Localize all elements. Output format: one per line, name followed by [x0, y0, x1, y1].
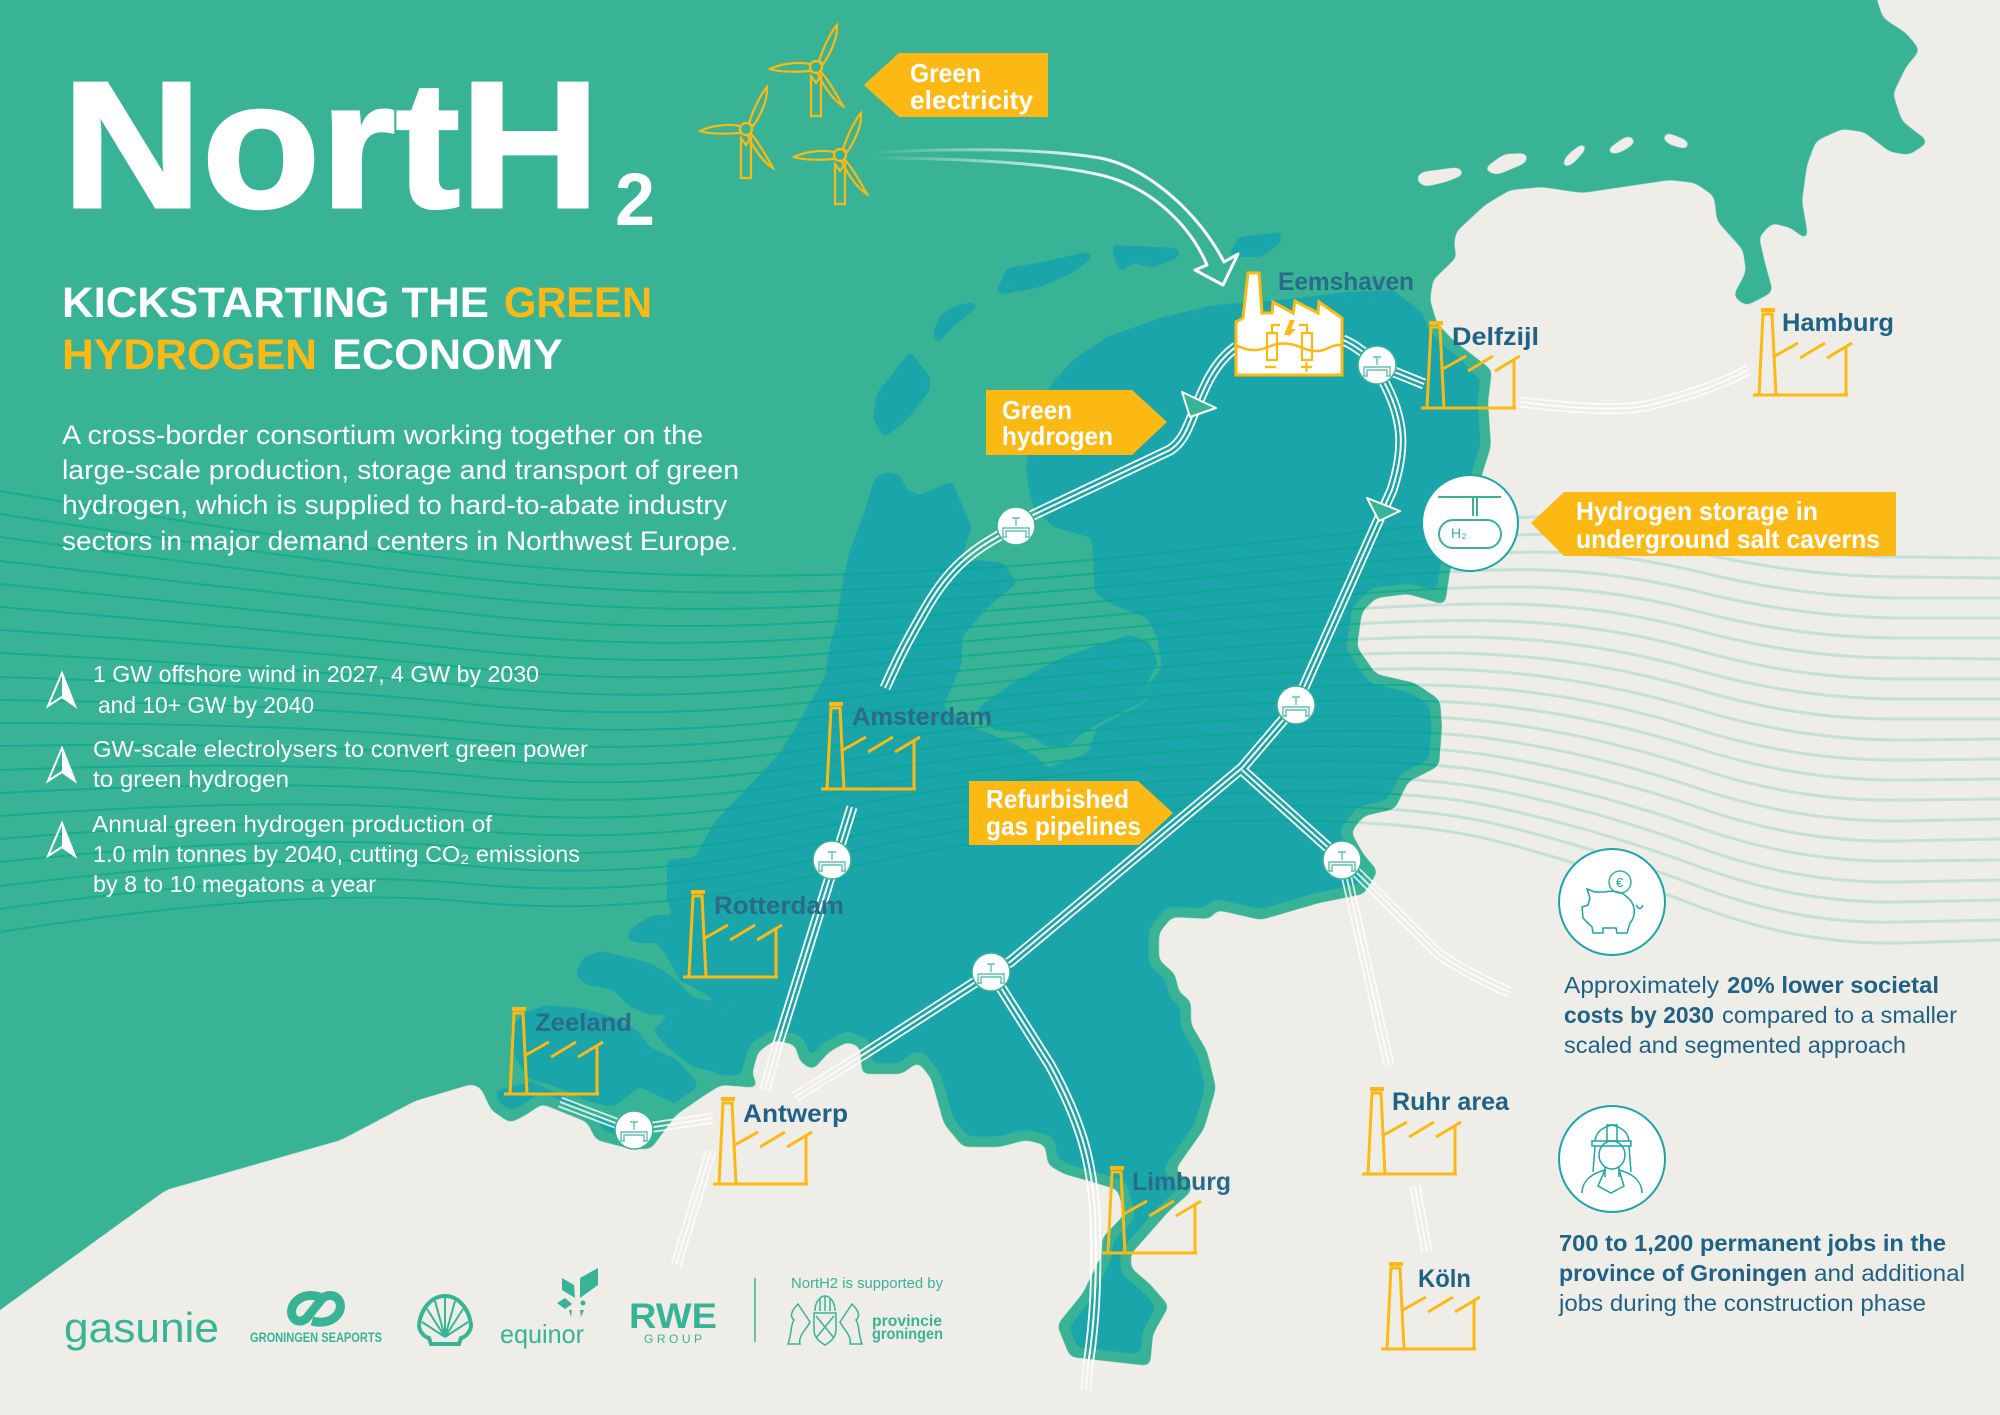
bullet: annual production: Annual green hydrogen production of — [92, 811, 493, 837]
label: Eemshaven: Eemshaven — [1278, 268, 1414, 296]
factory: Köln — [1381, 1264, 1480, 1349]
factory: Rotterdam: Rotterdam — [714, 892, 844, 920]
subtitle: GREEN — [504, 279, 652, 327]
text: permanent jobs: jobs during the construction phase — [1558, 1290, 1926, 1316]
flow arrow: storage — [1367, 498, 1400, 521]
refurbished gas pipelines — [760, 330, 1440, 1370]
callout: refurbished gas pipelines: Refurbished — [986, 784, 1129, 814]
wave lines over sea and Netherlands — [0, 491, 2000, 943]
subtitle: HYDROGEN — [62, 331, 317, 379]
factory: Hamburg: Hamburg — [1782, 309, 1894, 337]
subtitle: KICKSTARTING THE — [62, 279, 489, 327]
callout: hydrogen storage: Hydrogen storage in — [1576, 496, 1818, 526]
flow arrow: green hydrogen — [1182, 392, 1216, 417]
logo: Groningen Seaports — [250, 1295, 382, 1345]
bullet: electrolysers: GW-scale electrolysers to convert green power — [93, 736, 588, 762]
logo: provincie Groningen — [788, 1275, 943, 1345]
logo: provincie Groningen: groningen — [872, 1326, 943, 1343]
logo: Equinor: equinor — [500, 1319, 584, 1349]
factory: Hamburg — [1753, 309, 1894, 395]
factory: Ruhr area: Ruhr area — [1392, 1088, 1510, 1116]
factory: Delfzijl: Delfzijl — [1452, 323, 1539, 351]
green electricity arrow — [870, 150, 1238, 285]
callout: green electricity — [864, 53, 1048, 117]
intro paragraph: A cross-border consortium working together on the — [62, 420, 703, 450]
map: Flevoland polder — [977, 635, 1158, 747]
callout: hydrogen storage: underground salt caverns — [1576, 524, 1880, 554]
icon: Eemshaven electrolyser factory — [1236, 273, 1342, 375]
text: societal costs — [1564, 972, 1957, 1058]
factory: Amsterdam — [821, 703, 992, 789]
factory: Antwerp — [713, 1099, 848, 1184]
bullet: offshore wind: 1 GW offshore wind in 2027, 4 GW by 2030 — [93, 661, 539, 687]
intro paragraph: hydrogen, which is supplied to hard-to-abate industry — [62, 490, 728, 520]
title: NortH — [62, 45, 600, 246]
logo: Shell — [419, 1296, 471, 1344]
text: permanent jobs: 700 to 1,200 permanent jobs in the — [1559, 1230, 1946, 1256]
bullet: electrolysers — [48, 736, 588, 792]
factory: Rotterdam — [683, 892, 844, 977]
text: permanent jobs: province of Groningen — [1559, 1260, 1807, 1286]
bullet: offshore wind: and 10+ GW by 2040 — [98, 692, 314, 718]
bullet: annual production: 1.0 mln tonnes by 2040, cutting CO₂ emissions — [93, 841, 580, 867]
logo: RWE Group: RWE — [629, 1297, 717, 1336]
bullet: electrolysers: to green hydrogen — [93, 766, 289, 792]
factory: Limburg: Limburg — [1132, 1168, 1231, 1196]
callout: green hydrogen: hydrogen — [1002, 421, 1113, 451]
logo: provincie Groningen: NortH2 is supported by — [791, 1275, 943, 1292]
wave lines over land — [1358, 515, 2000, 945]
subtitle — [62, 279, 652, 379]
callout: green electricity: electricity — [910, 85, 1034, 115]
text: societal costs: costs by 2030 — [1564, 1002, 1714, 1028]
callout: refurbished gas pipelines: gas pipelines — [986, 811, 1141, 841]
factory: Ruhr area — [1362, 1088, 1510, 1174]
factory: Köln: Köln — [1418, 1265, 1471, 1293]
intro paragraph: sectors in major demand centers in Northwest Europe. — [62, 526, 738, 556]
factory: Zeeland — [504, 1009, 632, 1094]
bullet: annual production — [48, 811, 580, 897]
logo: Groningen Seaports: GRONINGEN SEAPORTS — [250, 1330, 382, 1345]
factory: Antwerp: Antwerp — [743, 1100, 848, 1128]
pipeline valves — [615, 346, 1396, 1149]
factory: Delfzijl — [1421, 323, 1539, 408]
divider — [754, 1278, 756, 1342]
logo: provincie Groningen: provincie — [872, 1313, 942, 1330]
logo: Equinor — [500, 1268, 598, 1349]
text: societal costs: Approximately — [1564, 972, 1720, 998]
icon: piggy bank — [1559, 849, 1665, 955]
bullet: annual production: by 8 to 10 megatons a year — [93, 871, 376, 897]
icon: hydrogen storage cavern: H₂ — [1451, 525, 1467, 541]
icon: female worker with helmet — [1559, 1106, 1665, 1212]
factory: Limburg — [1102, 1168, 1231, 1253]
text: societal costs: scaled and segmented approach — [1564, 1032, 1906, 1058]
icon: wind turbines — [700, 25, 867, 204]
title: 2 — [615, 158, 655, 241]
intro paragraph: large-scale production, storage and transport of green — [62, 455, 739, 485]
logo: Gasunie: gasunie — [64, 1304, 219, 1351]
intro paragraph — [62, 420, 739, 556]
subtitle: ECONOMY — [332, 331, 563, 379]
callout: green hydrogen: Green — [1002, 395, 1072, 425]
icon: hydrogen storage cavern — [1422, 475, 1518, 571]
logo: RWE Group: GROUP — [644, 1332, 702, 1346]
callout: green hydrogen — [986, 390, 1167, 455]
factory: Amsterdam: Amsterdam — [852, 703, 992, 731]
icon: piggy bank: € — [1616, 875, 1624, 890]
map: IJsselmeer — [943, 455, 1162, 768]
map: Netherlands mainland and Wadden islands — [497, 232, 1500, 1385]
text: societal costs: compared to a smaller — [1722, 1002, 1957, 1028]
bullet: offshore wind — [48, 661, 539, 718]
factory: Zeeland: Zeeland — [535, 1009, 632, 1037]
callout: hydrogen storage — [1531, 492, 1896, 556]
text: societal costs: 20% lower societal — [1727, 972, 1939, 998]
callout: green electricity: Green — [910, 58, 981, 88]
pipelines over land (faded) — [550, 360, 1760, 1400]
text: permanent jobs: and additional — [1814, 1260, 1965, 1286]
callout: refurbished gas pipelines — [969, 781, 1173, 845]
text: permanent jobs — [1558, 1230, 1965, 1316]
